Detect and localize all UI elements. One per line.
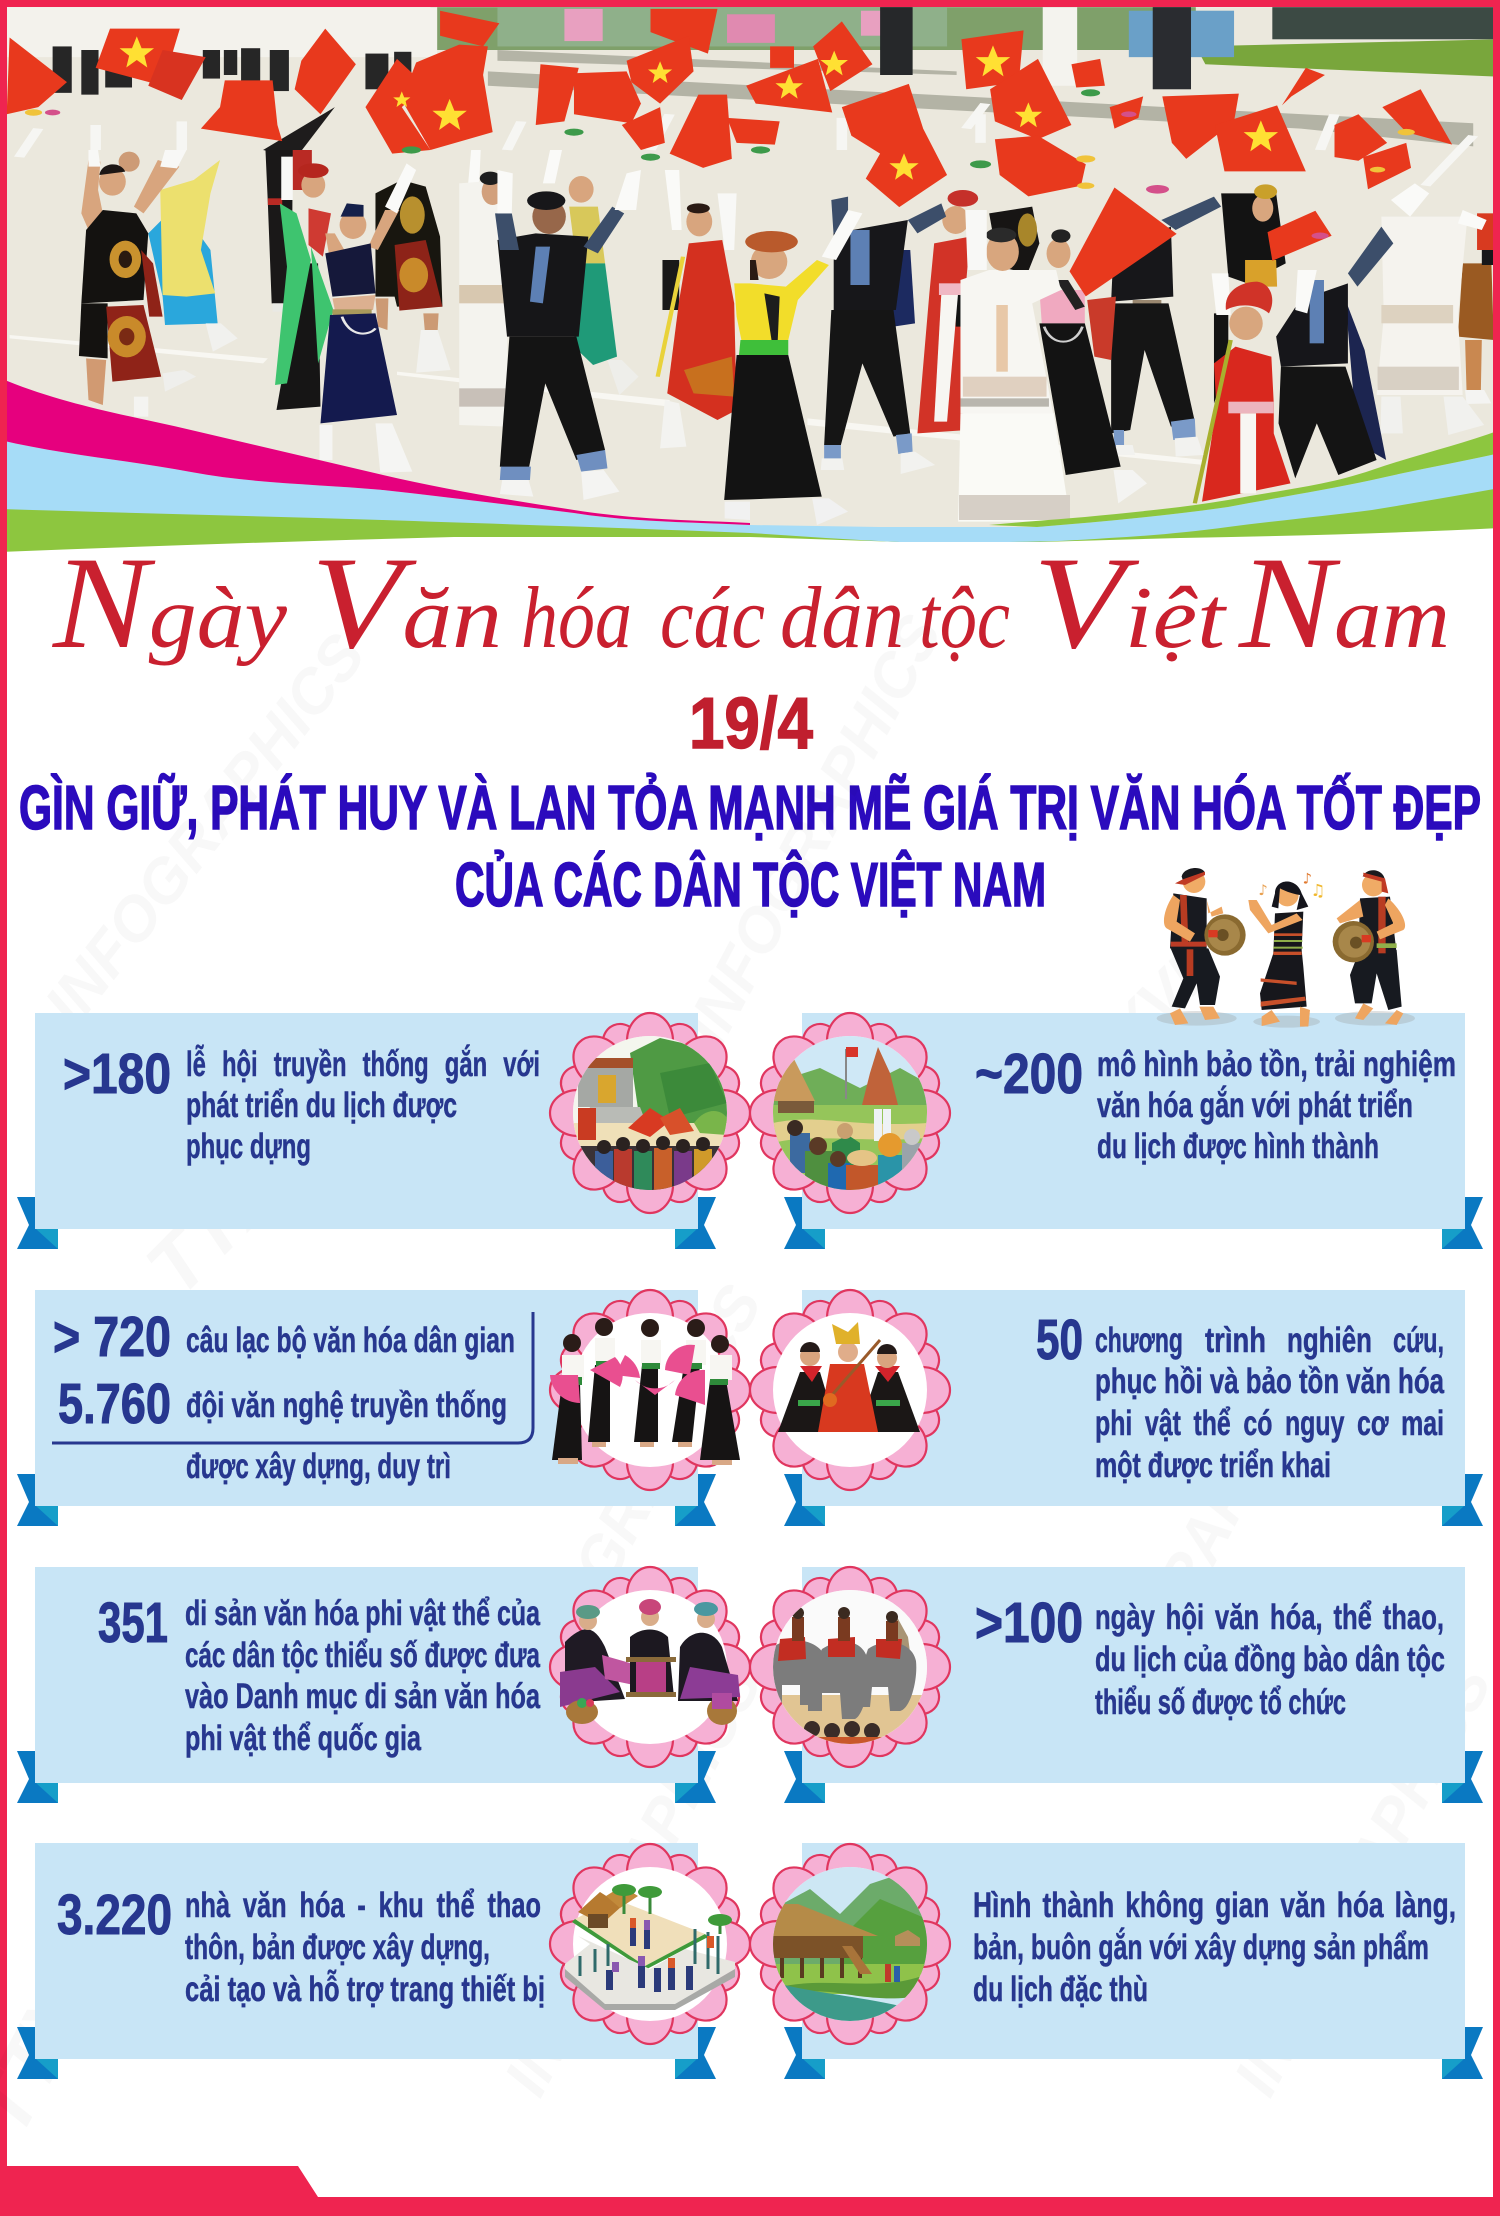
dancers, left half xyxy=(10,150,750,520)
watermark: INFOGRAPHICS xyxy=(491,1654,776,2107)
red skirt woman, center xyxy=(917,237,970,433)
number: ~200 xyxy=(975,1042,1083,1106)
icon: elephant race xyxy=(750,1567,950,1767)
card background xyxy=(17,1290,716,1526)
panel: row 3 right, 100 festivals xyxy=(784,1567,1483,1803)
description: vào Danh mục di sản văn hóa xyxy=(185,1677,540,1716)
card background xyxy=(17,1567,716,1803)
number: 3.220 xyxy=(57,1883,172,1947)
script title: các xyxy=(660,570,765,667)
panel: row 4 left, 3220 cultural houses xyxy=(17,1843,716,2079)
teal skirt woman xyxy=(569,207,605,263)
man in black, middle right xyxy=(1111,227,1173,302)
red woman at right xyxy=(1214,313,1228,403)
description xyxy=(1097,1045,1456,1166)
watermark: INFOGRAPHICS xyxy=(671,604,956,1057)
description xyxy=(973,1886,1456,2009)
watermark: TTXVN xyxy=(1041,927,1234,1120)
description: phục dựng xyxy=(186,1127,311,1166)
yellow and cyan dancer xyxy=(148,217,218,325)
panel: row 2 left, folk clubs and troupes xyxy=(17,1290,716,1526)
icon: tourism model scene xyxy=(750,1013,950,1213)
dancer in gold pattern behind xyxy=(989,207,1039,273)
card background xyxy=(784,1290,1483,1526)
description: đội văn nghệ truyền thống xyxy=(186,1386,507,1425)
red dress dancer xyxy=(665,170,682,230)
pink top woman in black skirt xyxy=(1087,297,1116,360)
colour waves xyxy=(0,378,1500,552)
description: câu lạc bộ văn hóa dân gian xyxy=(186,1321,515,1360)
panel: row 4 right, village cultural spaces xyxy=(784,1843,1483,2079)
photo banner: parade of ethnic groups with flags xyxy=(0,7,1500,552)
description: du lịch được hình thành xyxy=(1097,1127,1379,1166)
card background xyxy=(17,1013,716,1249)
white arms and bouquet xyxy=(385,150,562,213)
script title: dân xyxy=(780,570,904,667)
woman with apron behind xyxy=(375,180,442,307)
panel: row 3 left, 351 heritage items xyxy=(17,1567,716,1803)
dancers, right half xyxy=(750,184,1493,525)
watermark: TTXVN xyxy=(129,1062,379,1312)
music notes: ♪ xyxy=(1303,870,1312,887)
script title: Văn xyxy=(311,529,502,676)
description xyxy=(186,1044,540,1166)
number: 50 xyxy=(1036,1308,1083,1372)
script title: hóa xyxy=(521,570,632,667)
card background xyxy=(17,1843,716,2079)
icon: gong dancers illustration xyxy=(1157,868,1415,1028)
bracket line xyxy=(52,1312,533,1443)
watermark: INFOGRAPHICS xyxy=(1221,1654,1500,2107)
woman in green coat xyxy=(276,263,320,410)
description: thôn, bản được xây dựng, xyxy=(185,1928,490,1967)
watermark: INFOGRAPHICS xyxy=(32,622,379,1039)
description: một được triển khai xyxy=(1095,1446,1331,1485)
date 19/4: 19/4 xyxy=(689,684,813,764)
description: du lịch đặc thù xyxy=(973,1970,1148,2009)
far right patterned and white dancers xyxy=(1458,263,1494,340)
music notes xyxy=(1258,870,1326,900)
script title: Việt xyxy=(1033,529,1228,676)
flags and bouquets xyxy=(7,8,1452,296)
description: chương xyxy=(1095,1321,1183,1360)
description: nghiên xyxy=(1287,1321,1372,1360)
icon: sports and cultural house scene xyxy=(550,1844,750,2044)
description: lễ hội truyền thống gắn với xyxy=(186,1044,540,1084)
main heading xyxy=(19,774,1481,920)
white dancer, center xyxy=(960,270,1061,417)
man in black, left of right half xyxy=(893,250,915,327)
description xyxy=(185,1594,540,1758)
description xyxy=(1095,1598,1445,1722)
description: thiểu số được tổ chức xyxy=(1095,1683,1346,1722)
number: clubs: > 720 xyxy=(53,1305,171,1369)
icon: festival at temple xyxy=(550,1013,750,1213)
card background xyxy=(784,1843,1483,2079)
description: trình xyxy=(1205,1321,1266,1360)
description xyxy=(186,1321,515,1486)
number: >180 xyxy=(63,1042,171,1106)
description: cứu, xyxy=(1393,1321,1444,1360)
card background xyxy=(784,1013,1483,1249)
number: 351 xyxy=(98,1591,168,1655)
icon: Hmong weavers xyxy=(550,1567,750,1767)
panel: row 1 left, 180 festivals xyxy=(17,1013,716,1249)
black man behind at right xyxy=(1346,300,1386,460)
black-clad dancer at back xyxy=(265,150,293,303)
description: phát triển du lịch được xyxy=(186,1086,457,1125)
music notes: ♪ xyxy=(1258,882,1268,899)
panel: row 1 right, 200 models xyxy=(784,1013,1483,1249)
navy skirt woman xyxy=(325,210,399,260)
description: di sản văn hóa phi vật thể của xyxy=(185,1594,540,1633)
script title: tộc xyxy=(919,570,1010,667)
description xyxy=(185,1886,545,2009)
card background xyxy=(784,1567,1483,1803)
photo backdrop xyxy=(7,7,1493,527)
description: phi vật thể quốc gia xyxy=(185,1719,421,1758)
left part of yellow top woman xyxy=(734,283,750,340)
man with gong, right xyxy=(1333,870,1405,1025)
watermark xyxy=(0,604,1500,2148)
icon: stilt house in mountain valley xyxy=(750,1844,950,2044)
panel: row 2 right, 50 programmes xyxy=(784,1290,1483,1526)
watermark: INFOGRAPHICS xyxy=(491,1274,776,1727)
man in black with blue scarf xyxy=(497,233,588,337)
yellow top woman xyxy=(750,260,829,340)
white-robed dancer xyxy=(459,180,508,427)
description: nhà văn hóa - khu thể thao xyxy=(185,1886,541,1925)
man in black with red apron xyxy=(81,160,179,230)
number: troupes: 5.760 xyxy=(58,1372,171,1436)
icon: fan dancers xyxy=(550,1290,750,1490)
script title: Ngày xyxy=(52,529,288,676)
description: được xây dựng, duy trì xyxy=(186,1447,451,1486)
woman clapping xyxy=(1248,881,1310,1027)
music notes: ♫ xyxy=(1311,881,1326,900)
script title: Nam xyxy=(1238,529,1450,676)
script title xyxy=(52,529,1450,676)
number: >100 xyxy=(975,1591,1083,1655)
shadows xyxy=(1157,1011,1415,1028)
description: các dân tộc thiểu số được đưa xyxy=(185,1636,540,1675)
main heading: CỦA CÁC DÂN TỘC VIỆT NAM xyxy=(455,851,1046,920)
description xyxy=(1095,1321,1444,1485)
icon: Then singers xyxy=(750,1290,950,1490)
man with gong, left xyxy=(1164,868,1246,1025)
watermark: INFOGRAPHICS xyxy=(1051,1334,1336,1787)
description: cải tạo và hỗ trợ trang thiết bị xyxy=(185,1969,545,2009)
